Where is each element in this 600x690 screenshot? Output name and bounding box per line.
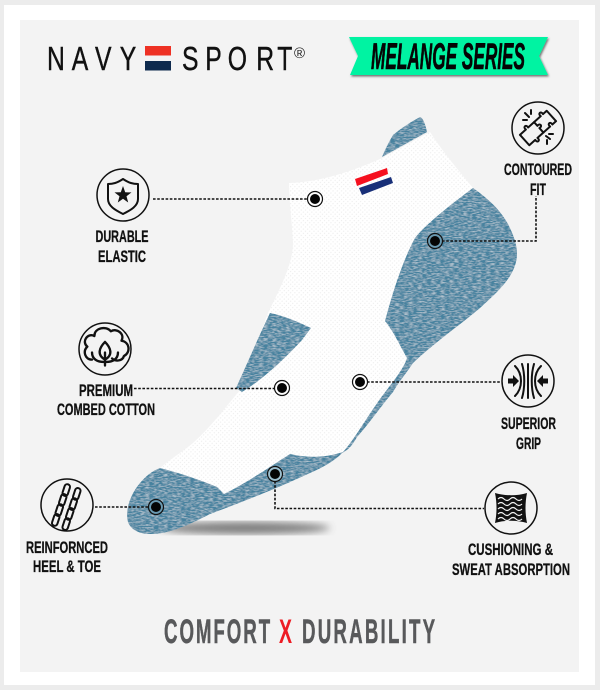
marker: toe	[148, 500, 164, 514]
label: premium combed cotton	[57, 382, 155, 419]
marker: grip	[352, 374, 368, 390]
heel patch	[342, 188, 517, 453]
icon: grip	[502, 355, 554, 407]
sole and toe	[127, 452, 343, 534]
heel tab	[382, 117, 427, 157]
label: premium combed cotton: PREMIUM	[79, 382, 133, 400]
arch gusset	[236, 313, 311, 392]
tagline: COMFORT	[164, 612, 270, 650]
logo word: sport: SPORT	[182, 42, 293, 78]
icon: shield	[97, 169, 149, 221]
marker: cotton	[274, 380, 290, 396]
label: superior grip: GRIP	[516, 435, 541, 453]
label: superior grip: SUPERIOR	[501, 415, 556, 433]
logo word: navy: NAVY	[47, 42, 136, 78]
ribbon: melange series	[349, 36, 548, 77]
leader line: durable elastic	[153, 198, 308, 200]
label: superior grip	[501, 415, 556, 453]
label: durable elastic	[96, 228, 148, 266]
label: reinforced heel and toe: HEEL & TOE	[33, 558, 101, 576]
label: cushioning and sweat absorption: CUSHIONING &	[468, 541, 553, 559]
label: cushioning and sweat absorption	[452, 541, 570, 579]
tagline: X	[279, 613, 292, 651]
leader line: cushioning	[275, 481, 484, 508]
label: durable elastic: DURABLE	[96, 228, 148, 246]
label: reinforced heel and toe: REINFORNCED	[26, 539, 108, 557]
label: premium combed cotton: COMBED COTTON	[57, 401, 155, 419]
label: contoured fit: FIT	[530, 181, 546, 199]
flag: blue stripe	[359, 177, 393, 195]
marker: elastic	[308, 192, 322, 206]
icon: cushion	[485, 482, 537, 534]
logo flag	[145, 46, 171, 70]
tagline	[164, 612, 435, 651]
registered mark: ®	[294, 45, 305, 62]
sock shadow	[160, 522, 330, 534]
tagline: DURABILITY	[302, 612, 435, 650]
ribbon shape	[349, 37, 548, 75]
leader line: superior grip	[367, 381, 501, 383]
label: reinforced heel and toe	[26, 539, 108, 576]
leader line: contoured fit	[442, 196, 536, 241]
sock illustration	[127, 117, 517, 534]
marker: cushioning	[268, 466, 282, 482]
sock body	[160, 132, 473, 495]
icon: cotton	[79, 323, 131, 375]
flag: red stripe	[355, 168, 388, 186]
label: contoured fit	[504, 161, 572, 199]
label: durable elastic: ELASTIC	[98, 248, 146, 266]
icon: chain links	[41, 479, 93, 531]
marker: contoured	[428, 234, 442, 248]
brand logo	[47, 42, 305, 78]
leader line: premium cotton	[134, 388, 275, 390]
leader line: reinforced	[95, 506, 149, 508]
icon: contoured puzzle	[512, 102, 564, 154]
